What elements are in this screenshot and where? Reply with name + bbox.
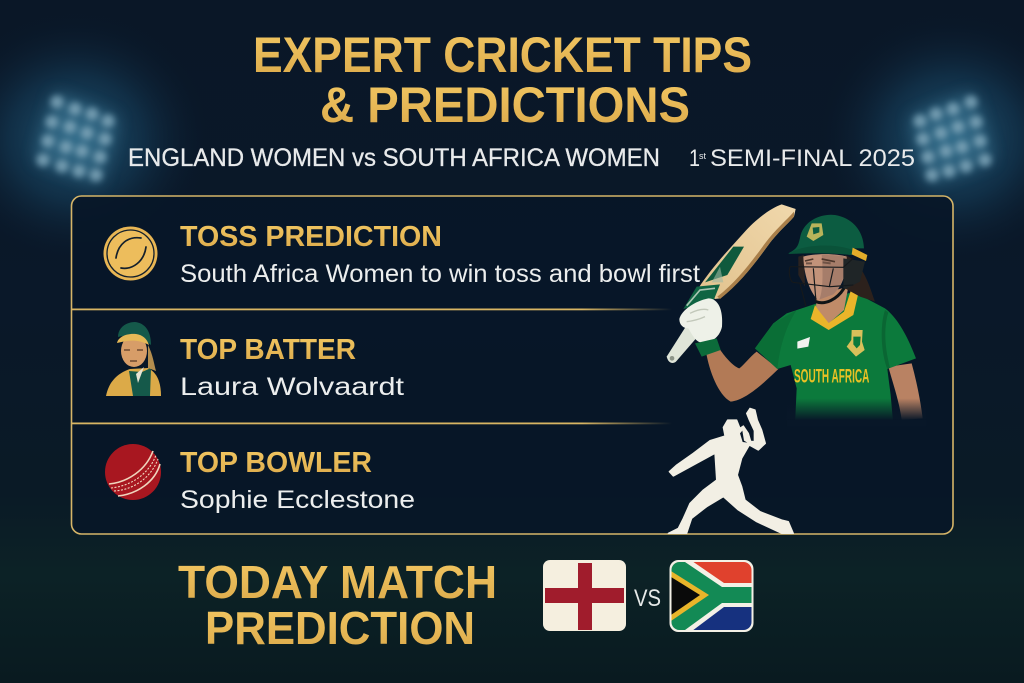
icon: gold coin <box>104 226 158 280</box>
neck <box>816 287 848 323</box>
glove <box>679 298 722 343</box>
subtitle: ENGLAND WOMEN vs SOUTH AFRICA WOMEN <box>128 144 660 172</box>
jersey fade <box>787 398 927 420</box>
jersey <box>755 292 916 425</box>
row: top batter: TOP BATTER <box>180 334 356 366</box>
bottom heading <box>178 556 497 654</box>
bottom heading: PREDICTION <box>205 602 475 654</box>
subtitle: 1 <box>689 145 700 172</box>
subtitle: SEMI-FINAL 2025 <box>710 145 915 172</box>
raised arm <box>706 348 778 402</box>
vs label: VS <box>634 585 661 612</box>
row: top batter <box>180 334 404 401</box>
collar <box>811 291 858 330</box>
bowler silhouette <box>668 408 793 533</box>
row: toss prediction: TOSS PREDICTION <box>180 221 442 253</box>
title <box>253 27 752 133</box>
row: top bowler: Sophie Ecclestone <box>180 486 415 514</box>
bat blade <box>698 204 796 299</box>
title: EXPERT CRICKET TIPS <box>253 27 752 83</box>
row: top bowler <box>180 447 415 514</box>
flag: South Africa <box>670 560 754 632</box>
subtitle: st <box>699 151 706 161</box>
batter figure <box>667 204 927 427</box>
bat handle <box>667 320 703 363</box>
row: toss prediction <box>180 221 700 288</box>
row: top batter: Laura Wolvaardt <box>180 373 404 401</box>
head and helmet <box>788 215 875 307</box>
floodlight: left <box>0 13 211 263</box>
icon: batter portrait <box>106 322 161 396</box>
title: & PREDICTIONS <box>320 77 690 133</box>
floodlight: right <box>817 13 1024 263</box>
row: toss prediction: South Africa Women to win toss and bowl first <box>180 260 700 288</box>
icon: cricket ball <box>105 444 161 500</box>
crest and chest logo <box>847 330 865 357</box>
right arm <box>888 363 923 420</box>
row: top bowler: TOP BOWLER <box>180 447 372 479</box>
panel: predictions <box>72 196 953 534</box>
batter figure: SOUTH AFRICA <box>794 366 869 387</box>
bottom heading: TODAY MATCH <box>178 556 497 608</box>
flag: England <box>543 560 626 631</box>
